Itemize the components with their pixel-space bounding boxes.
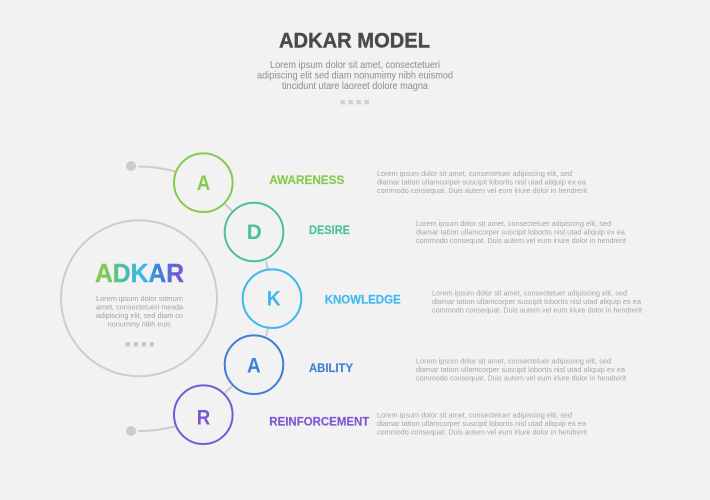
description knowledge: Lorem ipsum dolor sit amet, consectetuer adipiscing elit, sed (432, 288, 627, 298)
description reinforcement: Lorem ipsum dolor sit amet, consectetuer adipiscing elit, sed (377, 410, 572, 420)
description knowledge (432, 288, 642, 314)
subtitle text (257, 60, 453, 92)
description ability: commodo consequat. Duis autem vel eum iriure dolor in hendrerit (416, 374, 626, 382)
central description: Lorem ipsum dolor siterum (96, 294, 183, 303)
central description: amet, consectetueri mesda (96, 302, 184, 312)
label reinforcement: REINFORCEMENT (269, 416, 369, 429)
circle K (243, 269, 301, 328)
circle A (174, 153, 233, 212)
description desire: Lorem ipsum dolor sit amet, consectetuer adipiscing elit, sed (416, 219, 611, 228)
description ability: Lorem ipsum dolor sit amet, consectetuer adipiscing elit, sed (416, 356, 611, 366)
step: reinforcement (174, 385, 587, 444)
label knowledge: KNOWLEDGE (325, 294, 401, 307)
central dots (126, 342, 154, 346)
panel: central ADKAR circle (61, 220, 217, 376)
connector lines between circles (138, 166, 268, 431)
label awareness: AWARENESS (269, 174, 345, 187)
header dots (340, 100, 369, 104)
step: ability (225, 335, 626, 394)
bottom end dot (126, 426, 136, 436)
circle K: K (267, 286, 281, 310)
description desire: commodo consequat. Duis autem vel eum iriure dolor in hendrerit (416, 236, 626, 245)
label ability: ABILITY (309, 362, 353, 375)
circle D: D (247, 220, 262, 244)
ADKAR gradient heading: ADKAR (95, 258, 184, 288)
description ability (416, 356, 626, 382)
title: ADKAR MODEL (279, 30, 430, 52)
description knowledge: commodo consequat. Duis autem vel eum iriure dolor in hendrerit (432, 306, 642, 314)
circle A (225, 335, 283, 394)
step: knowledge (243, 269, 642, 328)
description reinforcement (377, 410, 587, 436)
central description: adipiscing elit, sed diam co (96, 311, 183, 320)
description awareness (377, 169, 587, 195)
top end dot (126, 161, 136, 171)
central description: nonummy nibh euis (108, 320, 171, 328)
description awareness: commodo consequat. Duis autem vel eum iriure dolor in hendrerit (377, 186, 587, 195)
circle R: R (197, 406, 211, 430)
central description (96, 294, 184, 328)
subtitle text: adipiscing elit sed diam nonumimy nibh euismod (257, 70, 453, 82)
label desire: DESIRE (309, 224, 350, 237)
circle A: A (247, 353, 261, 377)
description desire (416, 219, 626, 245)
description desire: diamar tation ullamcorper suscipit lobortis nisl utad aliquip ex ea (416, 228, 626, 236)
header (257, 30, 453, 104)
step: awareness (174, 153, 587, 212)
circle A: A (197, 171, 210, 195)
description reinforcement: diamar tation ullamcorper suscipit lobortis nisl utad aliquip ex ea (377, 419, 587, 428)
description ability: diamar tation ullamcorper suscipit lobortis nisl utad aliquip ex ea (416, 365, 626, 374)
description awareness: diamar tation ullamcorper suscipit lobortis nisl utad aliquip ex ea (377, 178, 587, 186)
step: desire (225, 203, 626, 261)
description knowledge: diamar tation ullamcorper suscipit lobortis nisl utad aliquip ex ea (432, 297, 642, 306)
circle R (174, 385, 233, 444)
subtitle text: tincidunt utare laoreet dolore magna (282, 81, 428, 92)
circle D (225, 203, 283, 261)
description awareness: Lorem ipsum dolor sit amet, consectetuer adipiscing elit, sed (377, 169, 572, 178)
description reinforcement: commodo consequat. Duis autem vel eum iriure dolor in hendrerit (377, 428, 587, 436)
subtitle text: Lorem ipsum dolor sit amet, consectetueri (270, 60, 440, 71)
